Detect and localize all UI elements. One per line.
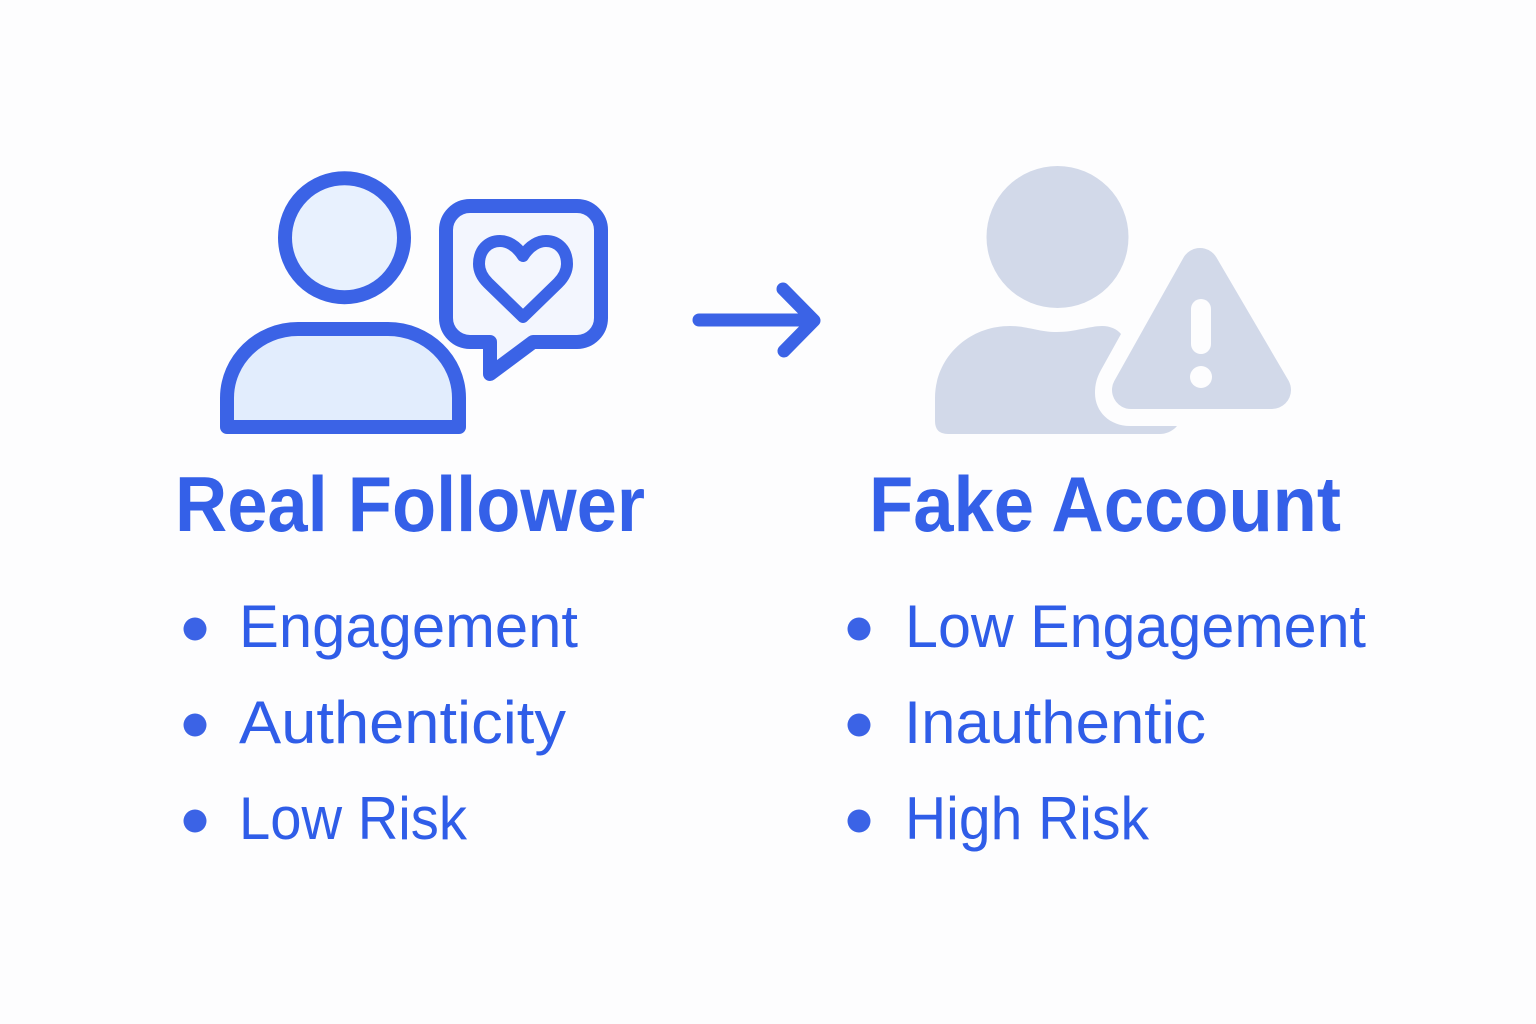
bullet	[184, 714, 206, 736]
icon: exclamation bar	[1191, 299, 1211, 354]
bullet	[184, 618, 206, 640]
heading: fake account: Fake Account	[869, 460, 1341, 548]
list item: Inauthentic	[904, 689, 1206, 756]
icon: real follower person with heart bubble	[227, 178, 601, 427]
bullet	[184, 810, 206, 832]
list item: Engagement	[239, 593, 578, 660]
panel: real follower	[175, 178, 645, 852]
panel: fake account	[848, 166, 1366, 852]
icon: exclamation dot	[1190, 366, 1212, 388]
list: fake account traits	[848, 593, 1366, 852]
bullet	[848, 810, 870, 832]
icon: speech bubble	[446, 206, 601, 374]
icon: grey head	[986, 166, 1128, 308]
bullet	[848, 618, 870, 640]
icon: heart	[479, 241, 567, 317]
list item: Low Engagement	[905, 593, 1366, 660]
icon: warning triangle	[1131, 267, 1272, 390]
icon: person head	[285, 178, 404, 297]
icon: fake account person with warning	[935, 166, 1272, 434]
arrow	[699, 289, 814, 351]
list item: High Risk	[905, 785, 1150, 852]
heading: real follower: Real Follower	[175, 460, 645, 548]
list: real follower traits	[184, 593, 578, 852]
list item: Authenticity	[239, 689, 566, 756]
icon: person body	[227, 329, 459, 427]
icon: grey body	[935, 326, 1177, 434]
list item: Low Risk	[239, 785, 468, 852]
bullet	[848, 714, 870, 736]
